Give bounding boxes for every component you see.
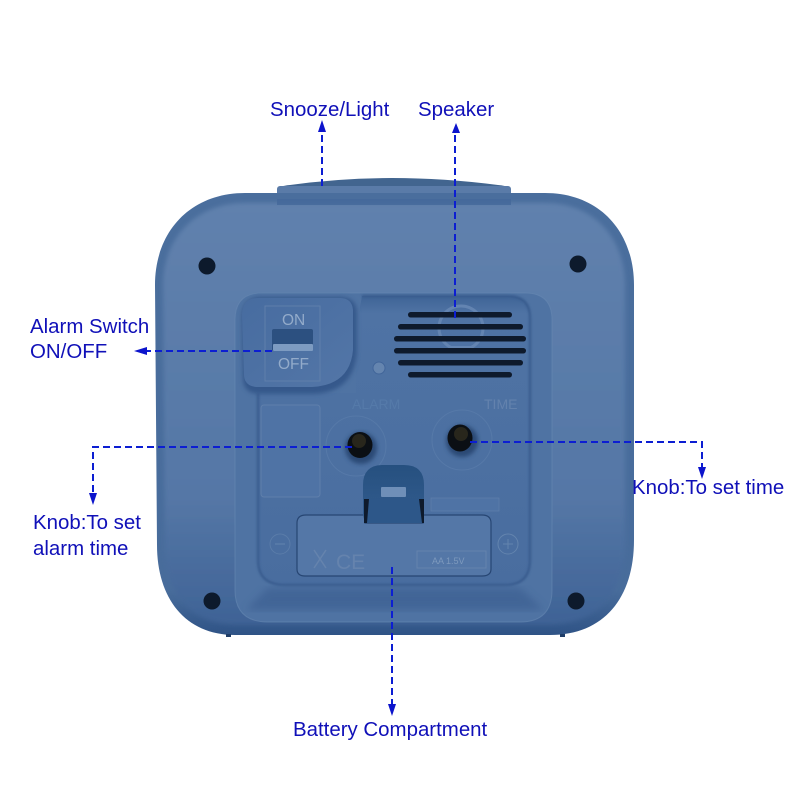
switch slot and slider [272,329,313,351]
label: alarm time knob: Knob:To set [33,511,141,534]
arrow: alarm switch [134,347,272,355]
alarm switch housing [242,297,357,394]
arrow: time knob [470,442,706,479]
battery label: AA 1.5V [432,556,465,566]
switch label OFF: OFF [278,356,309,373]
snooze/light button [277,178,511,200]
small round mark [373,362,385,374]
label: snooze/light: Snooze/Light [270,98,390,121]
switch label ON: ON [282,312,305,329]
arrow: battery compartment [388,567,396,716]
label: alarm time knob: alarm time [33,537,128,560]
battery label [417,551,486,568]
stand notch [363,465,424,523]
label: alarm switch: ON/OFF [30,340,107,363]
label plate recess [261,405,320,497]
base feet [226,634,565,637]
label: alarm switch: Alarm Switch [30,315,149,338]
label: battery compartment: Battery Compartment [293,718,488,741]
inner recess panel [258,296,530,585]
label: speaker: Speaker [418,98,494,121]
battery compartment door [297,515,491,576]
clock body shell [155,193,634,635]
corner screw holes [198,256,586,610]
embossed label ALARM: ALARM [352,396,400,412]
clock back: device photo illustration [155,178,634,637]
arrow: speaker [452,123,460,318]
arrow: snooze/light [318,120,326,186]
arrow: alarm knob [89,447,352,505]
battery door CE mark: CE [336,551,365,574]
body face highlight [163,203,625,624]
right knob [432,410,492,470]
embossed label TIME: TIME [484,396,517,412]
outer recess outline [235,293,552,622]
left knob [326,416,386,476]
polarity marks [270,534,518,554]
speaker vents [394,306,526,378]
plate beside notch [431,498,499,511]
label: time knob: Knob:To set time [632,476,784,499]
